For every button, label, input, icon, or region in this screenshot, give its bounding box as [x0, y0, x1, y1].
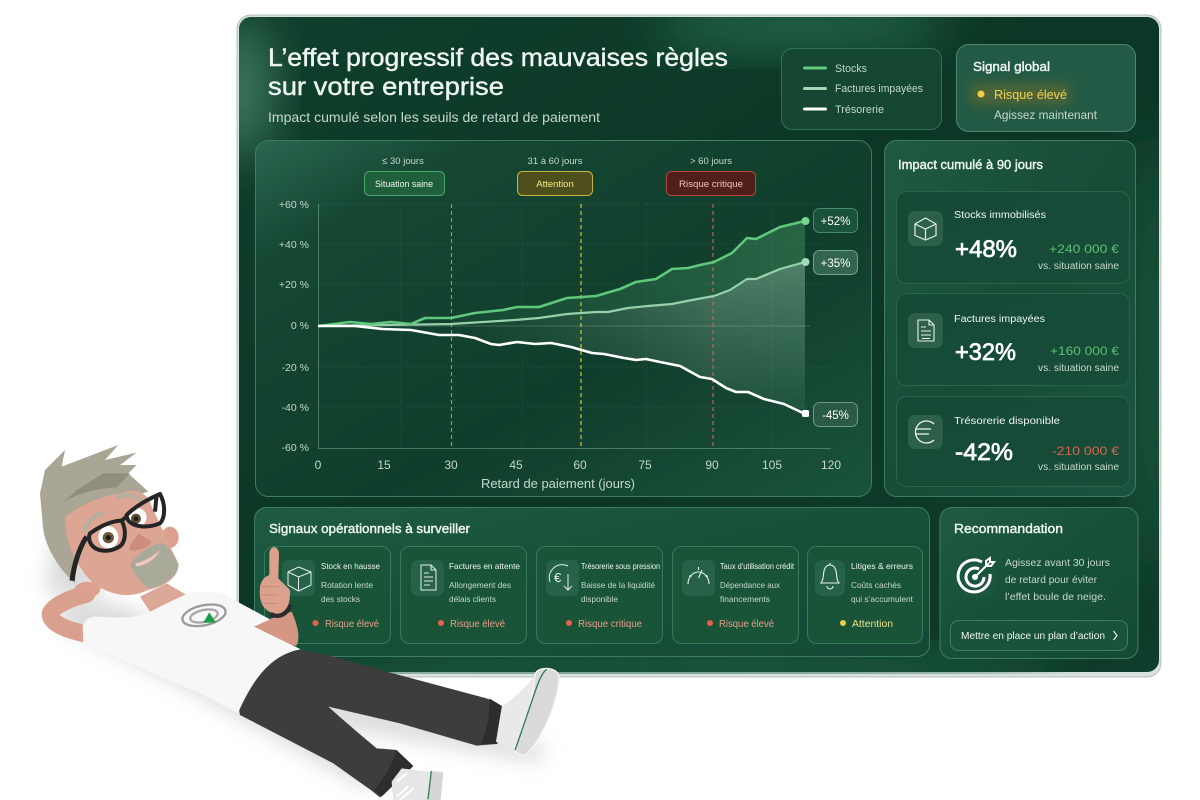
y axis labels: -20 % — [282, 362, 309, 374]
forearm raised — [253, 612, 298, 646]
card: trésorerie disponible: -42% — [955, 439, 1013, 466]
x axis labels: 30 — [444, 458, 458, 472]
signal card: trésorerie: Baisse de la liquidité — [581, 580, 655, 590]
signal card: factures — [400, 546, 526, 644]
threshold labels — [364, 156, 756, 196]
signal card: crédit: Dépendance aux — [720, 580, 781, 590]
threshold labels: 31 à 60 jours — [528, 156, 583, 167]
signal card: factures: Allongement des — [449, 580, 511, 590]
area between stocks and invoices — [451, 221, 805, 324]
signal card: trésorerie: Risque critique — [578, 619, 642, 630]
thumbs-up hand — [260, 547, 290, 614]
line: factures impayées — [318, 262, 805, 326]
ear — [161, 527, 179, 548]
value tag: +52%: +52% — [821, 216, 850, 228]
y axis labels: +60 % — [279, 199, 309, 211]
signal card: litiges: qui s’accumulent — [851, 594, 914, 604]
eyes — [98, 508, 147, 549]
shoe: right — [496, 669, 559, 755]
threshold labels: Attention — [536, 179, 574, 190]
signal card: litiges: Litiges & erreurs — [851, 561, 913, 571]
y axis labels: -40 % — [282, 402, 309, 414]
signal card: litiges — [808, 546, 922, 644]
value tag: -45%: -45% — [822, 410, 849, 422]
x axis labels: 0 — [315, 458, 322, 472]
x axis labels: 90 — [705, 458, 719, 472]
signal card: trésorerie — [536, 546, 662, 644]
x axis title: Retard de paiement (jours) — [481, 476, 635, 491]
signal card: stock: Rotation lente — [321, 580, 373, 590]
card: stocks immobilisés — [896, 192, 1130, 284]
body shadow on floor — [45, 520, 545, 785]
threshold labels: ≤ 30 jours — [382, 156, 424, 167]
y axis labels: -60 % — [282, 442, 309, 454]
x axis labels: 75 — [638, 458, 652, 472]
threshold lines — [452, 204, 713, 448]
signal card: factures: délais clients — [449, 594, 496, 604]
legend: Stocks — [835, 63, 867, 75]
card: factures impayées: +160 000 € — [1050, 344, 1119, 358]
signal card: crédit: Risque élevé — [719, 619, 774, 630]
panel: signaux opérationnels: Signaux opérationnels à surveiller — [269, 521, 471, 536]
beard — [130, 543, 179, 588]
icon: target — [955, 557, 995, 597]
header title: sur votre entreprise — [268, 73, 504, 101]
panel: impact cumulé: Impact cumulé à 90 jours — [898, 158, 1043, 172]
area between invoices and cash — [514, 264, 805, 411]
shoe: left — [392, 768, 443, 800]
threshold labels: Risque critique — [679, 179, 743, 190]
threshold labels: Situation saine — [375, 179, 433, 190]
card: factures impayées: vs. situation saine — [1038, 363, 1119, 374]
signal card: trésorerie: Trésorerie sous pression — [581, 561, 660, 571]
x axis labels: 60 — [573, 458, 587, 472]
glasses — [72, 494, 164, 581]
y axis labels: +20 % — [279, 279, 309, 291]
arm behind head — [50, 594, 92, 635]
hair back — [40, 445, 148, 583]
signal card: crédit: Taux d’utilisation crédit — [720, 561, 795, 571]
signal global card: Agissez maintenant — [994, 108, 1098, 122]
action button — [950, 620, 1128, 650]
header title: Impact cumulé selon les seuils de retard de paiement — [268, 109, 600, 125]
nose — [130, 533, 152, 550]
panel: chart — [256, 140, 872, 496]
signal card: litiges: Attention — [852, 619, 893, 630]
signal card: crédit — [672, 546, 798, 644]
signal global card: Signal global — [973, 59, 1050, 74]
signal global card: Risque élevé — [994, 87, 1067, 102]
neck — [140, 583, 187, 617]
card: factures impayées — [896, 294, 1130, 386]
dashboard board — [210, 3, 1175, 688]
threshold labels: > 60 jours — [690, 156, 732, 167]
card: factures impayées: +32% — [955, 339, 1016, 366]
signal card: stock — [264, 546, 390, 644]
card: trésorerie disponible — [896, 396, 1130, 486]
x axis labels: 15 — [377, 458, 391, 472]
character — [40, 445, 559, 800]
value tag: +52% — [814, 208, 858, 232]
card: stocks immobilisés: Stocks immobilisés — [954, 209, 1046, 221]
shirt logo — [180, 601, 228, 630]
y axis labels — [279, 199, 309, 454]
signal card: trésorerie: € — [554, 570, 562, 585]
signal card: stock: Risque élevé — [325, 619, 379, 630]
value tag: +35% — [814, 250, 858, 274]
legend: Factures impayées — [835, 83, 923, 95]
panel: recommandation: Recommandation — [954, 521, 1063, 536]
action button: Mettre en place un plan d’action — [961, 630, 1105, 642]
header title: L’effet progressif des mauvaises règles — [268, 44, 728, 72]
x axis labels — [315, 458, 841, 472]
signal card: factures: Risque élevé — [450, 619, 505, 630]
legend: Trésorerie — [835, 104, 884, 116]
legend — [782, 48, 942, 130]
eyebrows — [85, 495, 140, 530]
face — [65, 491, 178, 595]
watch — [271, 605, 291, 616]
end markers — [802, 217, 810, 417]
signal global card — [956, 44, 1136, 132]
card: trésorerie disponible: -210 000 € — [1052, 444, 1119, 458]
y axis labels: 0 % — [291, 320, 309, 332]
card: trésorerie disponible: vs. situation saine — [1038, 462, 1119, 473]
panel: recommandation: de retard pour éviter — [1005, 574, 1097, 586]
signal card: litiges: Coûts cachés — [851, 580, 901, 590]
panel: recommandation — [940, 508, 1138, 658]
grid and axes — [318, 204, 831, 448]
x axis labels: 105 — [762, 458, 782, 472]
panel: recommandation: Agissez avant 30 jours — [1005, 557, 1110, 569]
value tag: -45% — [814, 402, 858, 426]
signal card: crédit: financements — [720, 594, 770, 604]
card: stocks immobilisés: +240 000 € — [1049, 242, 1119, 256]
signal card: factures: Factures en attente — [449, 561, 520, 571]
legs — [238, 650, 559, 800]
signal card: stock: des stocks — [321, 594, 360, 604]
card: stocks immobilisés: +48% — [955, 236, 1017, 263]
x axis labels: 45 — [509, 458, 523, 472]
line: trésorerie — [318, 326, 805, 414]
line: stocks — [318, 221, 805, 326]
signal card: trésorerie: disponible — [581, 594, 618, 604]
card: stocks immobilisés: vs. situation saine — [1038, 261, 1119, 272]
panel: recommandation: l’effet boule de neige. — [1005, 591, 1106, 603]
panel: signaux opérationnels — [254, 508, 930, 656]
header title — [268, 44, 728, 125]
panel: impact cumulé — [884, 140, 1136, 496]
shirt — [83, 592, 301, 713]
value tag: +35%: +35% — [821, 258, 850, 270]
x axis labels: 120 — [821, 458, 841, 472]
card: factures impayées: Factures impayées — [954, 313, 1045, 325]
card: trésorerie disponible: Trésorerie disponible — [954, 415, 1060, 427]
y axis labels: +40 % — [279, 239, 309, 251]
signal card: stock: Stock en hausse — [321, 561, 380, 571]
